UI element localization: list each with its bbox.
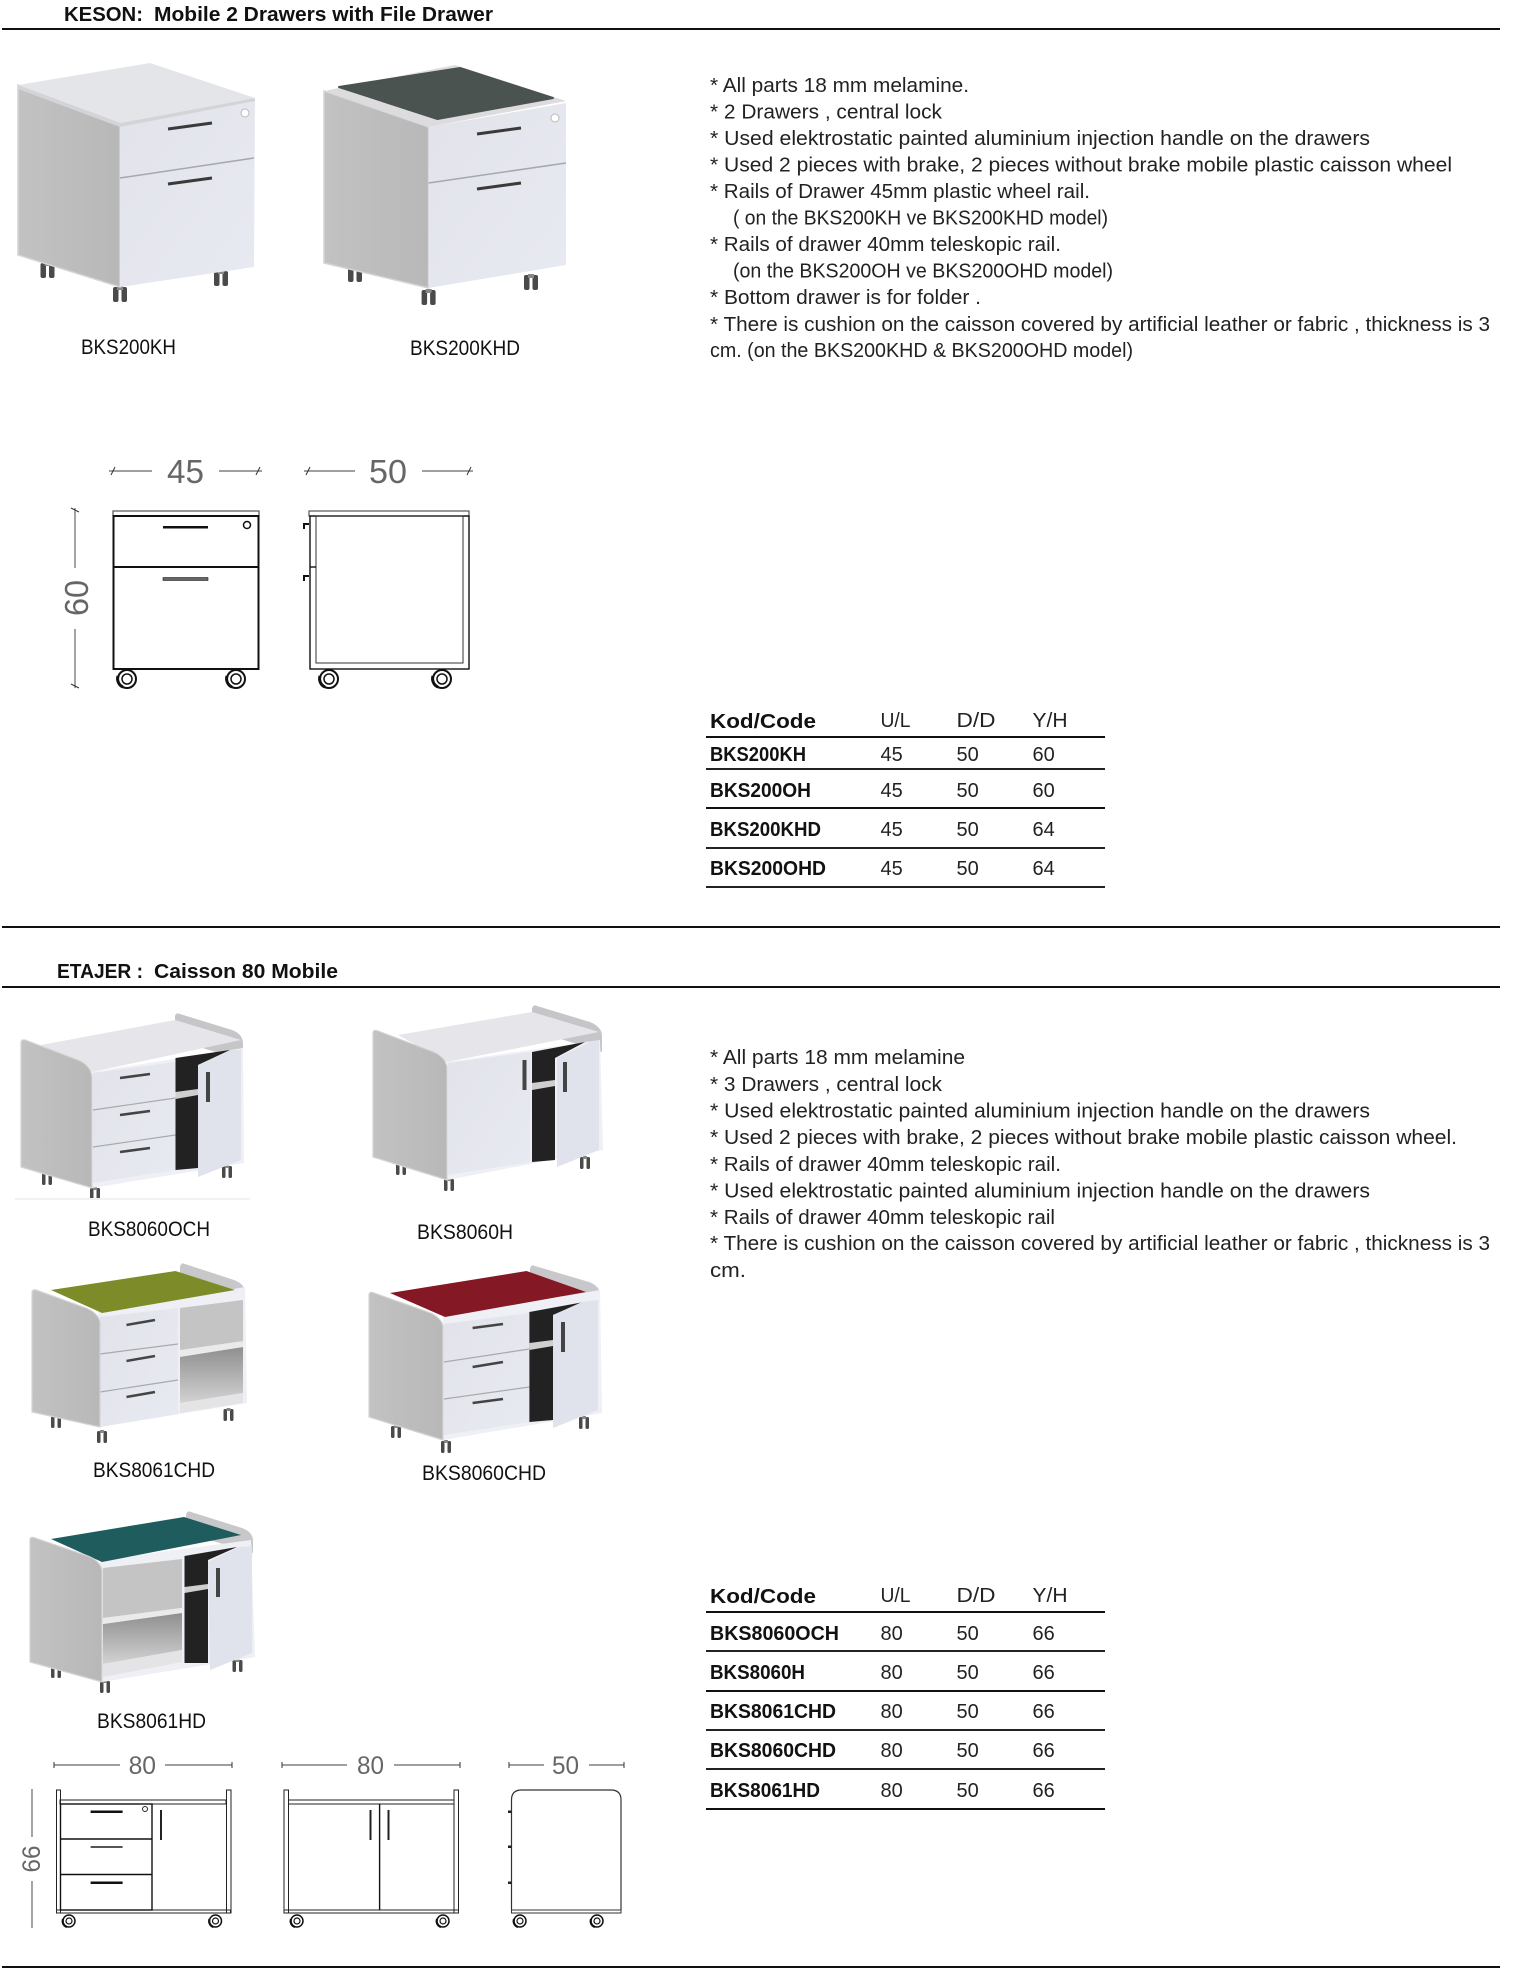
heading: KESON: Mobile 2 Drawers with File Drawer (154, 4, 493, 26)
text block: ETAJER specifications: * Used elektrostatic painted aluminium injection handle on the drawers (710, 1100, 1370, 1122)
table: KESON sizes: D/D (956, 710, 996, 732)
text block: ETAJER specifications: cm. (710, 1260, 746, 1282)
drawing: front view (113, 511, 259, 688)
table: ETAJER sizes (706, 1585, 1105, 1810)
table: ETAJER sizes: 66 (1032, 1623, 1055, 1645)
table: ETAJER sizes: 80 (880, 1740, 903, 1762)
table: KESON sizes: BKS200OH (710, 780, 811, 802)
table: ETAJER sizes: 50 (956, 1623, 979, 1645)
table: ETAJER sizes: BKS8060H (710, 1662, 805, 1684)
drawing: side view (508, 1790, 621, 1927)
label: BKS200KHD: BKS200KHD (410, 337, 520, 360)
dimension: width 80 front B (282, 1752, 460, 1780)
table: KESON sizes: 50 (956, 744, 979, 766)
table: KESON sizes (706, 710, 1105, 888)
text block: KESON specifications: * Used 2 pieces with brake, 2 pieces without brake mobile plastic caisson wheel (710, 154, 1452, 176)
table: ETAJER sizes: 50 (956, 1740, 979, 1762)
table: KESON sizes: BKS200OHD (710, 858, 826, 880)
technical drawing: KESON dimensions (58, 453, 473, 688)
table: ETAJER sizes: 66 (1032, 1662, 1055, 1684)
section: KESON (2, 4, 1500, 888)
text block: KESON specifications (710, 75, 1490, 362)
dimension: height 66: 66 (18, 1846, 46, 1872)
table: ETAJER sizes: Y/H (1032, 1585, 1068, 1607)
dimension: width 80 front B: 80 (357, 1752, 384, 1780)
product image: BKS8060OCH (15, 1013, 250, 1200)
text block: ETAJER specifications: * 3 Drawers , central lock (710, 1074, 943, 1096)
table: ETAJER sizes: 50 (956, 1701, 979, 1723)
text block: ETAJER specifications: * All parts 18 mm melamine (710, 1047, 965, 1069)
product image: BKS8060H (373, 1005, 603, 1191)
table: KESON sizes: 45 (880, 744, 903, 766)
text block: ETAJER specifications: * Used 2 pieces with brake, 2 pieces without brake mobile plastic caisson wheel. (710, 1127, 1457, 1149)
heading: ETAJER: ETAJER : (57, 961, 143, 983)
technical drawing: ETAJER dimensions (18, 1752, 624, 1928)
dimension: width 45: 45 (167, 453, 204, 490)
label: BKS8060H: BKS8060H (417, 1221, 513, 1244)
drawing: front view with drawers (56, 1790, 231, 1927)
heading: KESON: KESON: (64, 4, 143, 26)
table: KESON sizes: 60 (1032, 744, 1055, 766)
table: ETAJER sizes: D/D (956, 1585, 996, 1607)
text block: KESON specifications: * There is cushion on the caisson covered by artificial leather or fabric , thickness is 3 (710, 314, 1490, 336)
text block: ETAJER specifications: * Rails of drawer 40mm teleskopic rail. (710, 1154, 1061, 1176)
table: KESON sizes: 45 (880, 858, 903, 880)
text block: KESON specifications: (on the BKS200OH ve BKS200OHD model) (733, 260, 1113, 282)
table: KESON sizes: BKS200KHD (710, 819, 821, 841)
table: KESON sizes: 64 (1032, 819, 1055, 841)
table: ETAJER sizes: 80 (880, 1662, 903, 1684)
table: ETAJER sizes: 66 (1032, 1701, 1055, 1723)
drawing: front view with doors (284, 1790, 458, 1927)
table: KESON sizes: 60 (1032, 780, 1055, 802)
table: KESON sizes: BKS200KH (710, 744, 806, 766)
table: ETAJER sizes: 66 (1032, 1740, 1055, 1762)
dimension: height 60: 60 (58, 580, 95, 616)
dimension: depth 50 (304, 453, 473, 490)
dimension: width 45 (109, 453, 262, 490)
text block: KESON specifications: ( on the BKS200KH ve BKS200KHD model) (733, 208, 1108, 230)
text block: KESON specifications: * Rails of drawer 40mm teleskopic rail. (710, 234, 1061, 256)
table: ETAJER sizes: 50 (956, 1780, 979, 1802)
table: KESON sizes: 64 (1032, 858, 1055, 880)
label: BKS8060CHD: BKS8060CHD (422, 1462, 546, 1485)
table: ETAJER sizes: U/L (880, 1585, 910, 1607)
text block: KESON specifications: cm. (on the BKS200KHD & BKS200OHD model) (710, 340, 1133, 362)
text block: ETAJER specifications: * There is cushion on the caisson covered by artificial leather or fabric , thickness is 3 (710, 1233, 1490, 1255)
product image: BKS8060CHD (369, 1265, 602, 1453)
table: ETAJER sizes: 50 (956, 1662, 979, 1684)
product image: BKS200KH (18, 63, 255, 302)
label: BKS8061HD: BKS8061HD (97, 1710, 206, 1733)
drawing: side view (304, 511, 469, 688)
table: ETAJER sizes: 80 (880, 1701, 903, 1723)
section: ETAJER (2, 961, 1500, 1928)
table: KESON sizes: 45 (880, 780, 903, 802)
table: KESON sizes: U/L (880, 710, 910, 732)
table: ETAJER sizes: BKS8060CHD (710, 1740, 836, 1762)
table: ETAJER sizes: 66 (1032, 1780, 1055, 1802)
dimension: width 80 front A (54, 1752, 232, 1780)
table: KESON sizes: 50 (956, 858, 979, 880)
table: ETAJER sizes: BKS8061CHD (710, 1701, 836, 1723)
table: ETAJER sizes: 80 (880, 1780, 903, 1802)
table: ETAJER sizes: 80 (880, 1623, 903, 1645)
dimension: depth 50: 50 (552, 1752, 579, 1780)
label: BKS8061CHD: BKS8061CHD (93, 1459, 215, 1482)
dimension: height 60 (58, 508, 95, 688)
table: KESON sizes: Y/H (1032, 710, 1068, 732)
dimension: depth 50: 50 (369, 453, 407, 490)
heading: ETAJER (57, 961, 338, 983)
text block: ETAJER specifications (710, 1047, 1490, 1282)
dimension: width 80 front A: 80 (129, 1752, 156, 1780)
text block: KESON specifications: * Used elektrostatic painted aluminium injection handle on the drawers (710, 128, 1370, 150)
table: KESON sizes: 50 (956, 780, 979, 802)
product image: BKS8061HD (30, 1511, 255, 1693)
text block: KESON specifications: * Bottom drawer is for folder . (710, 287, 981, 309)
text block: ETAJER specifications: * Used elektrostatic painted aluminium injection handle on the drawers (710, 1180, 1370, 1202)
dimension: depth 50 (509, 1752, 624, 1780)
dimension: height 66 (18, 1789, 46, 1928)
product image: BKS8061CHD (32, 1263, 247, 1443)
table: ETAJER sizes: BKS8061HD (710, 1780, 820, 1802)
table: ETAJER sizes: Kod/Code (710, 1586, 816, 1608)
label: BKS8060OCH: BKS8060OCH (88, 1218, 210, 1241)
heading: ETAJER: Caisson 80 Mobile (154, 961, 338, 983)
text block: KESON specifications: * 2 Drawers , central lock (710, 102, 943, 124)
table: KESON sizes: Kod/Code (710, 711, 816, 733)
table: KESON sizes: 50 (956, 819, 979, 841)
product image: BKS200KHD (324, 65, 566, 305)
text block: ETAJER specifications: * Rails of drawer 40mm teleskopic rail (710, 1207, 1055, 1229)
table: KESON sizes: 45 (880, 819, 903, 841)
text block: KESON specifications: * All parts 18 mm melamine. (710, 75, 969, 97)
text block: KESON specifications: * Rails of Drawer 45mm plastic wheel rail. (710, 181, 1090, 203)
label: BKS200KH: BKS200KH (81, 336, 176, 359)
table: ETAJER sizes: BKS8060OCH (710, 1623, 839, 1645)
